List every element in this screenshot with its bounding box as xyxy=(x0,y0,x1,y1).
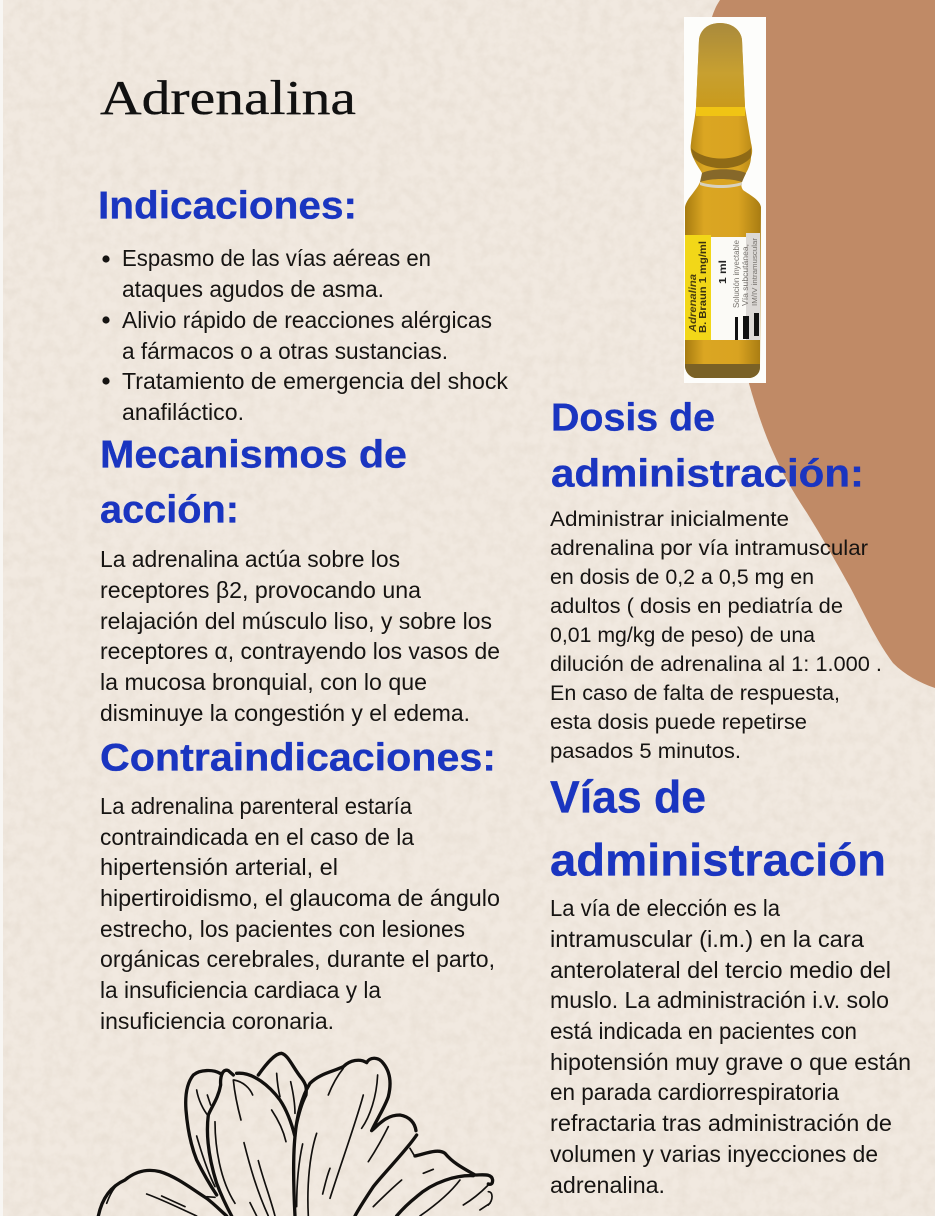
list: indicaciones xyxy=(102,245,508,425)
text block: contraindicaciones: La adrenalina parenteral estaría xyxy=(100,793,412,819)
text block: dosis de administración: En caso de falta de respuesta, xyxy=(550,681,840,705)
text block: dosis de administración: dilución de adrenalina al 1: 1.000 . xyxy=(550,652,882,676)
list: indicaciones: Espasmo de las vías aéreas en xyxy=(122,245,431,271)
text block: vías de administración: refractaria tras administración de xyxy=(550,1110,892,1136)
image: adrenaline ampoule: 1 ml xyxy=(718,260,729,284)
text block: contraindicaciones: estrecho, los pacientes con lesiones xyxy=(100,916,465,942)
text block: contraindicaciones: contraindicada en el caso de la xyxy=(100,824,414,850)
heading: contraindicaciones: Contraindicaciones: xyxy=(100,736,496,780)
image: adrenaline ampoule: Solución inyectable xyxy=(732,239,741,308)
text block: contraindicaciones xyxy=(100,793,500,1034)
text block: contraindicaciones: hipertensión arterial, el xyxy=(100,854,338,880)
heading: vías de administración: Vías de xyxy=(550,772,706,822)
list: indicaciones: a fármacos o a otras sustancias. xyxy=(122,338,448,364)
text block: mecanismos de acción: relajación del músculo liso, y sobre los xyxy=(100,608,492,634)
text block: mecanismos de acción: la mucosa bronquial, con lo que xyxy=(100,669,427,695)
heading: dosis de administración xyxy=(551,396,864,496)
text block: mecanismos de acción: La adrenalina actúa sobre los xyxy=(100,546,400,572)
text block: contraindicaciones: la insuficiencia cardiaca y la xyxy=(100,977,381,1003)
title: Adrenalina xyxy=(100,70,356,125)
list: indicaciones: anafiláctico. xyxy=(122,399,244,425)
text block: dosis de administración: adultos ( dosis en pediatría de xyxy=(550,594,843,618)
heading: mecanismos de acción: Mecanismos de xyxy=(100,434,407,476)
image: adrenaline ampoule: Vía subcutánea, xyxy=(741,244,750,306)
text block: vías de administración: muslo. La administración i.v. solo xyxy=(550,987,889,1013)
text block: dosis de administración: pasados 5 minutos. xyxy=(550,739,741,763)
heading: dosis de administración: Dosis de xyxy=(551,396,715,440)
text block: dosis de administración: adrenalina por vía intramuscular xyxy=(550,536,868,560)
text block: vías de administración: volumen y varias inyecciones de xyxy=(550,1141,878,1167)
heading: dosis de administración: administración: xyxy=(551,452,864,496)
text block: vías de administración: está indicada en pacientes con xyxy=(550,1018,857,1044)
decorative brown blob xyxy=(712,0,935,688)
illustration: line-art flower xyxy=(98,1053,493,1216)
text block: vías de administración: adrenalina. xyxy=(550,1172,665,1198)
text block: vías de administración: anterolateral del tercio medio del xyxy=(550,957,891,983)
text block: dosis de administración xyxy=(550,507,882,763)
text block: mecanismos de acción xyxy=(100,546,500,726)
image: adrenaline ampoule: B. Braun 1 mg/ml xyxy=(698,241,709,333)
text block: dosis de administración: 0,01 mg/kg de peso) de una xyxy=(550,623,815,647)
text block: mecanismos de acción: receptores α, contrayendo los vasos de xyxy=(100,638,500,664)
text block: dosis de administración: esta dosis puede repetirse xyxy=(550,710,807,734)
text block: dosis de administración: en dosis de 0,2 a 0,5 mg en xyxy=(550,565,814,589)
text block: contraindicaciones: insuficiencia coronaria. xyxy=(100,1008,334,1034)
text block: dosis de administración: Administrar inicialmente xyxy=(550,507,789,531)
image: adrenaline ampoule: Adrenalina xyxy=(688,274,699,333)
list: indicaciones: ataques agudos de asma. xyxy=(122,276,384,302)
text block: contraindicaciones: orgánicas cerebrales, durante el parto, xyxy=(100,946,495,972)
image: adrenaline ampoule xyxy=(684,17,766,383)
list: indicaciones: Tratamiento de emergencia del shock xyxy=(122,368,508,394)
text block: vías de administración: intramuscular (i.m.) en la cara xyxy=(550,926,864,952)
text block: vías de administración xyxy=(550,895,911,1198)
heading: vías de administración: administración xyxy=(550,834,886,886)
heading: vías de administración xyxy=(550,772,886,886)
text block: vías de administración: La vía de elección es la xyxy=(550,895,780,921)
text block: mecanismos de acción: receptores β2, provocando una xyxy=(100,577,421,603)
image: adrenaline ampoule: IM/IV intramuscular xyxy=(752,237,759,306)
heading: mecanismos de acción xyxy=(100,434,407,532)
heading: indicaciones: Indicaciones: xyxy=(98,184,357,228)
heading: mecanismos de acción: acción: xyxy=(100,488,239,532)
list: indicaciones: Alivio rápido de reacciones alérgicas xyxy=(122,307,492,333)
text block: vías de administración: en parada cardiorrespiratoria xyxy=(550,1079,839,1105)
text block: mecanismos de acción: disminuye la congestión y el edema. xyxy=(100,700,470,726)
text block: vías de administración: hipotensión muy grave o que están xyxy=(550,1049,911,1075)
text block: contraindicaciones: hipertiroidismo, el glaucoma de ángulo xyxy=(100,885,500,911)
